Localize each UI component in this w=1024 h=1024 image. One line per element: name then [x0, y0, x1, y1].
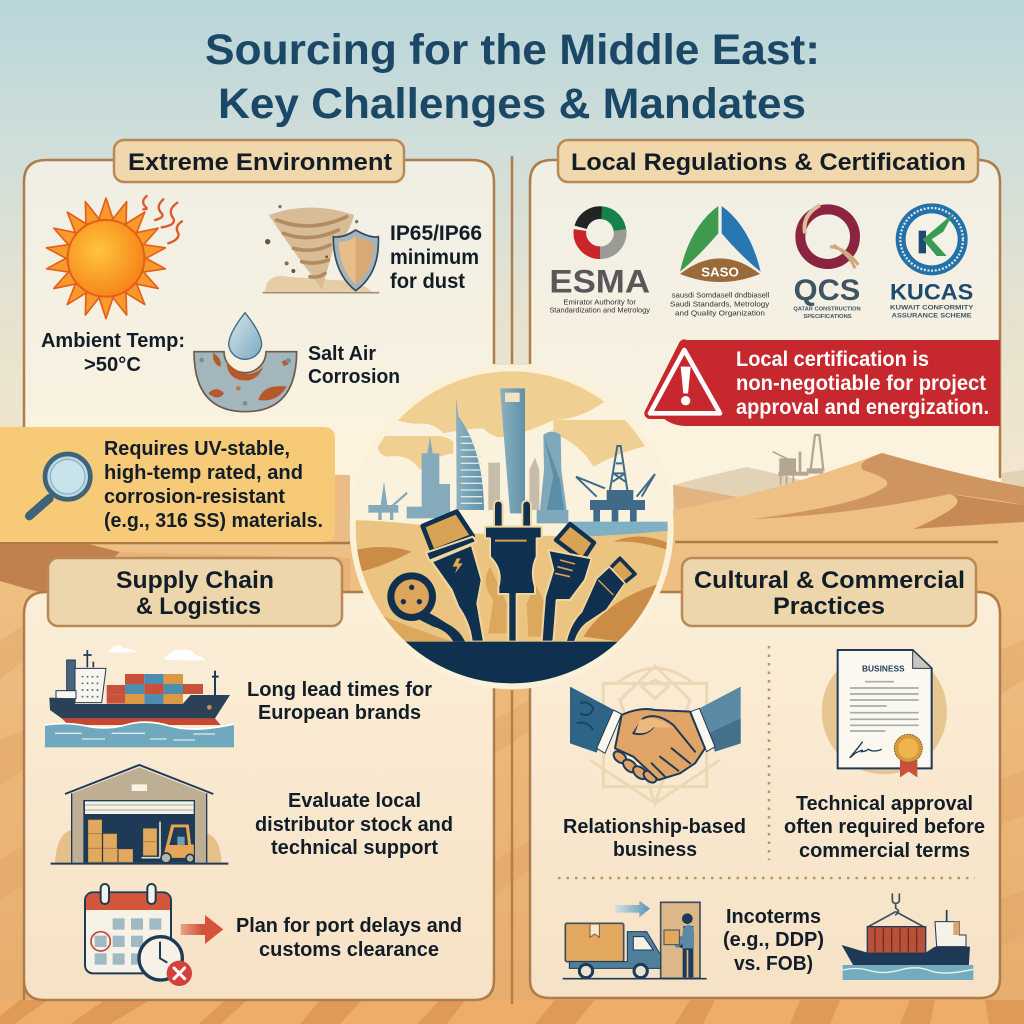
- text: dust rating: [390, 222, 482, 293]
- logo: QCS: QCS: [794, 274, 860, 307]
- text: incoterms: [723, 905, 824, 975]
- vertical divider between bottom panels: [511, 690, 513, 1004]
- icon: calendar with clock and delay: [85, 884, 223, 986]
- panel: cultural and commercial practices: [530, 558, 1000, 998]
- heading: cultural practices: Practices: [773, 593, 885, 620]
- text: dust rating: for dust: [390, 270, 465, 293]
- panel: local regulations and certification: [530, 140, 1000, 478]
- logo: ESMA: Emirator Authority for: [563, 300, 637, 307]
- text: technical approval: commercial terms: [799, 839, 970, 862]
- callout: certification warning: [650, 340, 1000, 426]
- text: port delays: [236, 914, 462, 961]
- heading: extreme environment: Extreme Environment: [128, 149, 392, 176]
- logo: QCS: QATAR CONSTRUCTION: [793, 307, 861, 313]
- icon: cargo ship with crane: [842, 893, 973, 980]
- callout: certification warning: non-negotiable for project: [736, 372, 986, 395]
- callout: material requirements: high-temp rated, and: [104, 461, 303, 484]
- oil rigs: [368, 482, 408, 520]
- heading: supply chain: Supply Chain: [116, 567, 274, 594]
- icon: corroded metal and salt droplet: [194, 313, 297, 412]
- text: incoterms: vs. FOB): [734, 952, 813, 975]
- base: [406, 642, 618, 684]
- text: dust rating: minimum: [390, 246, 479, 269]
- text: long lead times: European brands: [258, 701, 421, 724]
- heading: cultural practices: [682, 558, 976, 626]
- text: local distributor: [255, 789, 453, 859]
- central emblem: skyline and power plugs: [340, 365, 680, 692]
- icon: magnifying glass: [29, 454, 90, 516]
- text: local distributor: technical support: [271, 836, 438, 859]
- vertical divider between top panels: [511, 156, 513, 364]
- text: local distributor: distributor stock and: [255, 813, 453, 836]
- callout: certification warning: Local certification is: [736, 348, 929, 371]
- logo: ESMA: Standardization and Metrology: [549, 308, 651, 315]
- plug: tilted with bolt: [423, 512, 484, 642]
- text: incoterms: (e.g., DDP): [723, 928, 824, 951]
- icon: certificate with seal: [822, 649, 947, 777]
- sky: [353, 370, 673, 523]
- plug: central two-pin: [485, 501, 542, 642]
- icon: handshake with geometric pattern: [570, 666, 741, 803]
- icon: delivery truck to door: [563, 901, 707, 979]
- title: [205, 27, 820, 128]
- text: relationship-based business: business: [613, 838, 697, 861]
- icon: dust storm and shield: [263, 205, 379, 293]
- logo: QCS: SPECIFICATIONS: [803, 314, 852, 320]
- panel: extreme environment: [24, 140, 494, 428]
- text: technical approval: often required before: [784, 815, 985, 838]
- text: technical approval: Technical approval: [796, 792, 973, 815]
- logo: SASO: sausdi Somdasell dndbiasell: [672, 292, 770, 299]
- heading: local regulations: [558, 140, 978, 182]
- logo: QCS: [793, 205, 861, 320]
- logo: SASO: [670, 206, 770, 318]
- text: dust rating: IP65/IP66: [390, 222, 482, 245]
- sea and dunes: [566, 522, 668, 536]
- text: ambient temperature: [41, 329, 185, 376]
- icon: warning triangle: [650, 345, 720, 413]
- text: relationship-based business: [563, 815, 746, 861]
- callout: material requirements: [0, 427, 335, 542]
- heading: extreme environment: [114, 140, 404, 182]
- text: salt air corrosion: Corrosion: [308, 365, 400, 388]
- text: long lead times: [247, 678, 432, 724]
- text: port delays: Plan for port delays and: [236, 914, 462, 937]
- text: relationship-based business: Relationship-based: [563, 815, 746, 838]
- text: port delays: customs clearance: [259, 938, 439, 961]
- callout: certification warning: approval and energization.: [736, 396, 989, 419]
- icon: warehouse with forklift: [51, 765, 228, 864]
- plug: right data connector: [542, 524, 594, 642]
- text: salt air corrosion: Salt Air: [308, 342, 376, 365]
- heading: supply chain: & Logistics: [136, 593, 261, 620]
- heading: supply chain: [48, 558, 342, 626]
- plug: far right small connector: [566, 558, 635, 642]
- logo: ESMA: ESMA: [549, 264, 650, 300]
- logo: SASO: Saudi Standards, Metrology: [670, 302, 770, 309]
- logo: SASO: SASO: [701, 265, 739, 280]
- title: Key Challenges & Mandates: [218, 81, 806, 128]
- text: ambient temperature: >50°C: [84, 353, 141, 376]
- logo: SASO: and Quality Organization: [675, 311, 765, 318]
- distant towers: [488, 457, 539, 510]
- plug: round socket: [387, 572, 465, 642]
- callout: material requirements: Requires UV-stable,: [104, 437, 290, 460]
- logo: ESMA: [549, 213, 651, 315]
- text: technical approval: [784, 792, 985, 862]
- callout: material requirements: corrosion-resistant: [104, 485, 285, 508]
- text: long lead times: Long lead times for: [247, 678, 432, 701]
- text: incoterms: Incoterms: [726, 905, 821, 928]
- logo: KUCAS: KUCAS: [890, 279, 973, 304]
- logo: KUCAS: ASSURANCE SCHEME: [892, 312, 972, 319]
- icon: certificate with seal: BUSINESS: [862, 663, 905, 673]
- logo: KUCAS: [890, 203, 974, 319]
- icon: blazing sun: [45, 196, 182, 319]
- text: local distributor: Evaluate local: [288, 789, 421, 812]
- text: ambient temperature: Ambient Temp:: [41, 329, 185, 352]
- icon: container ship: [45, 645, 234, 747]
- heading: local regulations: Local Regulations & Certification: [571, 149, 966, 176]
- text: salt air corrosion: [308, 342, 400, 388]
- skyline: [407, 437, 450, 518]
- panel: supply chain and logistics: [24, 558, 494, 1000]
- logo: KUCAS: KUWAIT CONFORMITY: [890, 304, 974, 311]
- callout: material requirements: (e.g., 316 SS) materials.: [104, 509, 323, 532]
- heading: cultural practices: Cultural & Commercial: [694, 567, 965, 594]
- title: Sourcing for the Middle East:: [205, 27, 820, 74]
